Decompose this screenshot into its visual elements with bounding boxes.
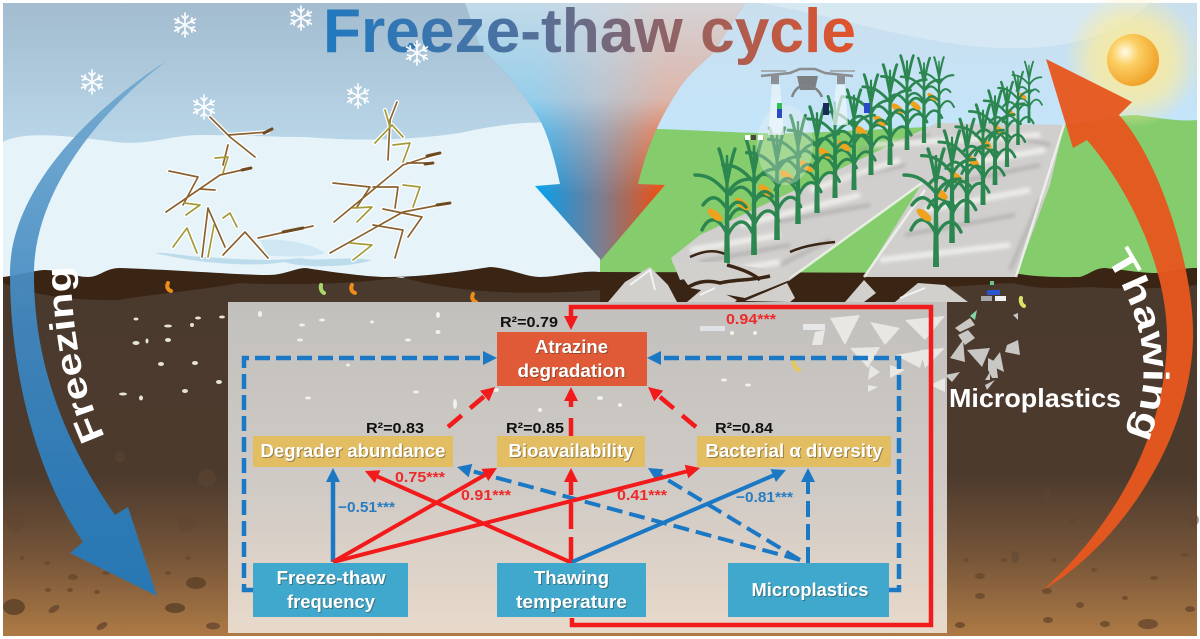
box: bacterial diversity — [697, 436, 891, 467]
snowflakes — [82, 6, 368, 119]
label: Microplastics: Microplastics — [949, 383, 1121, 413]
path coefficients: 0.94*** — [726, 311, 776, 328]
red solid loop: thawing temperature to degradation — [571, 307, 931, 625]
sun — [1065, 0, 1200, 128]
central funnel arrow — [465, 3, 745, 260]
blue dashed: microplastics to degradation — [657, 358, 899, 590]
snow hill — [3, 123, 600, 285]
film cracks — [690, 242, 835, 278]
freezing arrow — [10, 60, 168, 596]
thawing arrow — [1043, 59, 1193, 590]
plastic clumps on soil surface — [608, 262, 968, 302]
box: atrazine degradation — [497, 332, 647, 386]
path coefficients — [338, 311, 793, 516]
box: freeze-thaw frequency: Freeze-thaw — [276, 567, 386, 588]
box: atrazine degradation: degradation — [518, 360, 626, 381]
r-squared labels: R²=0.84 — [715, 420, 774, 437]
path coefficients: −0.81*** — [736, 489, 793, 506]
label: Freezing: Freezing — [48, 268, 104, 444]
thawing temperature to bioavailability — [569, 478, 573, 563]
drone — [745, 69, 870, 140]
panel shards — [812, 315, 945, 392]
panel specks — [258, 311, 757, 412]
red solid links — [333, 470, 690, 562]
soil — [3, 267, 1199, 636]
thawing temperature to bacterial diversity — [572, 474, 777, 562]
box: bioavailability: Bioavailability — [508, 440, 634, 461]
corn rows — [695, 56, 1042, 267]
box: microplastics — [728, 563, 889, 617]
soil pebbles — [3, 553, 1195, 632]
spray mist — [757, 105, 813, 185]
box: freeze-thaw frequency: frequency — [287, 591, 376, 612]
r-squared labels — [366, 314, 774, 437]
microplastics dashed links — [467, 470, 808, 563]
box: thawing temperature: temperature — [516, 591, 627, 612]
label: Thawing: Thawing — [1112, 246, 1170, 440]
worms and flakes in soil — [119, 281, 1024, 400]
path coefficients: −0.51*** — [338, 499, 395, 516]
panel: path diagram — [228, 302, 947, 633]
path coefficients: 0.91*** — [461, 487, 511, 504]
box: thawing temperature — [497, 563, 646, 617]
blue dashed: freeze-thaw frequency to degradation — [244, 358, 487, 590]
winter sky — [3, 3, 603, 283]
green hill — [600, 115, 1197, 285]
box: bacterial diversity: Bacterial α diversity — [706, 440, 883, 461]
box: freeze-thaw frequency — [253, 563, 408, 617]
summer sky — [600, 3, 1197, 283]
r-squared labels: R²=0.85 — [506, 420, 564, 437]
frozen reeds — [155, 102, 450, 266]
box: atrazine degradation: Atrazine — [535, 336, 608, 357]
box: degrader abundance — [253, 436, 453, 467]
freeze-thaw to degrader abundance — [331, 478, 335, 562]
box: bioavailability — [497, 436, 645, 467]
box: microplastics: Microplastics — [752, 579, 868, 600]
r-squared labels: R²=0.83 — [366, 420, 424, 437]
snowflake over title — [407, 41, 427, 65]
red dashed arrows to degradation — [448, 393, 696, 436]
r-squared labels: R²=0.79 — [500, 314, 558, 331]
box: degrader abundance: Degrader abundance — [260, 440, 446, 461]
path coefficients: 0.41*** — [617, 487, 667, 504]
plastic film mulch — [671, 123, 1064, 280]
microplastic shards in soil — [945, 313, 1020, 390]
box: thawing temperature: Thawing — [534, 567, 609, 588]
path coefficients: 0.75*** — [395, 469, 445, 486]
topsoil dark band — [3, 267, 1197, 302]
